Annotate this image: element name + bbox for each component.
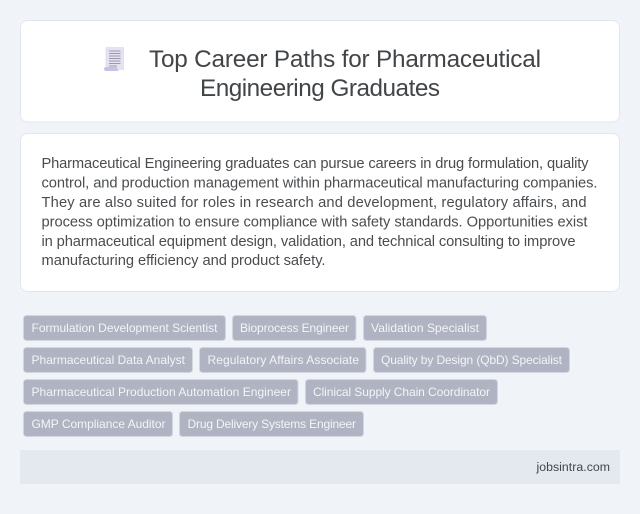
tag [374,348,570,372]
icon: document scroll [104,48,124,71]
tag: Pharmaceutical Production Automation Engineer [32,385,291,399]
tag: Formulation Development Scientist [32,321,218,335]
tag: Pharmaceutical Data Analyst [32,353,186,367]
text block: description: Pharmaceutical Engineering graduates can pursue careers in drug formulation, quality [42,156,589,172]
footer [20,450,620,484]
tag: Clinical Supply Chain Coordinator [313,385,490,399]
tag [232,316,356,340]
tag [306,380,498,404]
text block: description: control, and production management within pharmaceutical manufacturing companies. [42,175,598,191]
tag [180,412,364,436]
text block: description [42,156,598,269]
tag: Regulatory Affairs Associate [208,353,359,367]
tag [24,412,172,436]
text block: description: They are also suited for roles in research and development, regulatory affairs, and [42,195,586,211]
tag [24,380,298,404]
tag [364,316,486,340]
title [149,46,541,102]
title: Top Career Paths for Pharmaceutical [149,46,541,73]
text block: description: manufacturing efficiency and product safety. [42,253,326,269]
tag: Drug Delivery Systems Engineer [188,417,356,431]
panel: description [20,134,620,292]
tag: Validation Specialist [371,321,480,335]
tag: Quality by Design (QbD) Specialist [381,353,563,367]
footer source text: jobsintra.com [536,460,610,474]
text block: description: in pharmaceutical equipment design, validation, and technical consulting to improve [42,234,576,250]
tag [200,348,366,372]
text block: description: process optimization to ensure compliance with safety standards. Opportunities exist [42,214,588,230]
tag list: career paths [24,316,570,436]
tag: Bioprocess Engineer [240,321,349,335]
tag [24,348,192,372]
tag [24,316,226,340]
panel: header [20,20,620,122]
title: Engineering Graduates [200,75,440,102]
tag: GMP Compliance Auditor [32,417,166,431]
